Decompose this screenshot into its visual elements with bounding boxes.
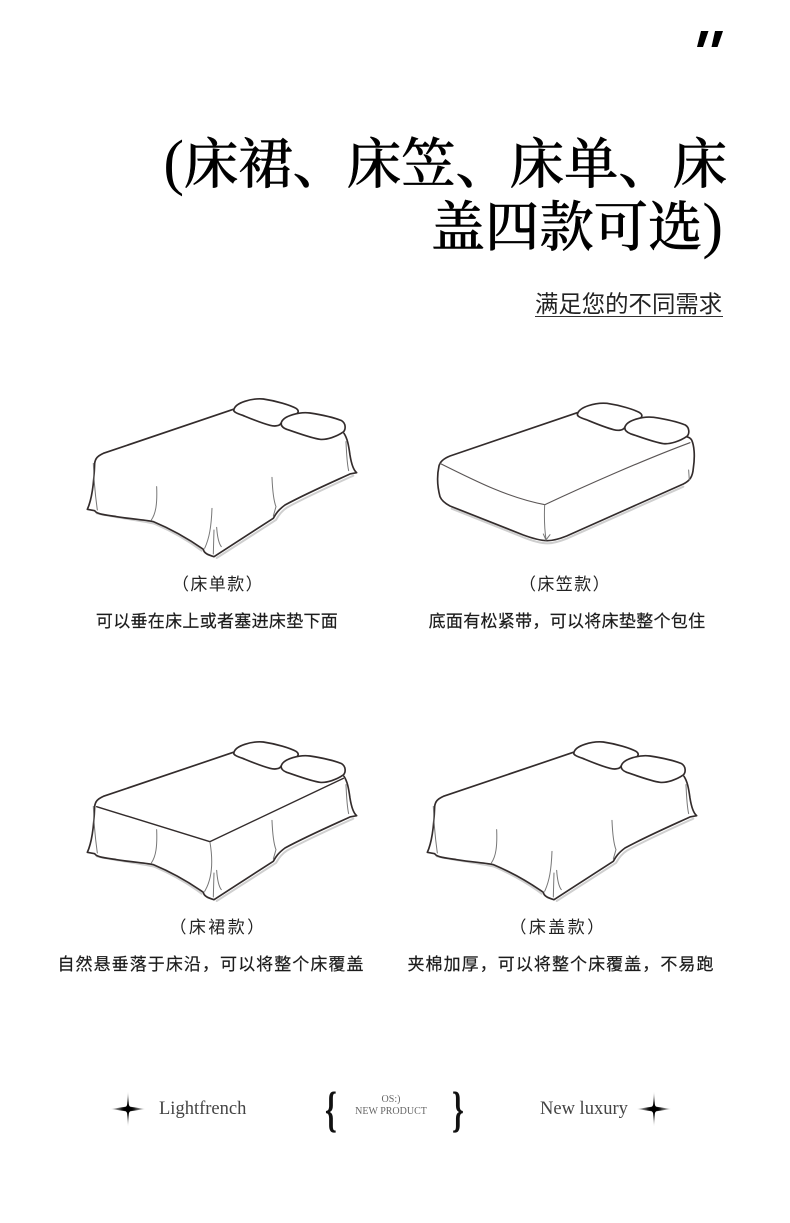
description: flat sheet: 可以垂在床上或者塞进床垫下面 [96, 612, 338, 631]
text: new product tag [355, 1094, 427, 1117]
title [163, 121, 727, 262]
label: flat sheet: （床单款） [172, 575, 264, 594]
icon: right brace: } [452, 1081, 464, 1137]
text: New luxury: New luxury [540, 1099, 628, 1119]
title: (床裙、床笠、床单、床 [163, 121, 727, 199]
description: bed skirt: 自然悬垂落于床沿，可以将整个床覆盖 [57, 955, 365, 974]
text: new product tag: OS:) [382, 1094, 400, 1105]
title: 盖四款可选) [431, 184, 723, 262]
text: Lightfrench: Lightfrench [159, 1099, 246, 1119]
text: new product tag: NEW PRODUCT [355, 1106, 427, 1117]
description: fitted sheet: 底面有松紧带，可以将床垫整个包住 [429, 612, 705, 631]
icon: quotation mark [697, 31, 723, 47]
icon: left brace: { [325, 1081, 337, 1137]
icon: right sparkle [638, 1093, 670, 1125]
subtitle: 满足您的不同需求 [535, 291, 722, 317]
label: fitted sheet: （床笠款） [519, 575, 611, 594]
description: bedspread: 夹棉加厚，可以将整个床覆盖，不易跑 [407, 955, 715, 974]
label: bed skirt: （床裙款） [170, 918, 266, 937]
label: bedspread: （床盖款） [510, 918, 606, 937]
icon: left sparkle [112, 1093, 144, 1125]
